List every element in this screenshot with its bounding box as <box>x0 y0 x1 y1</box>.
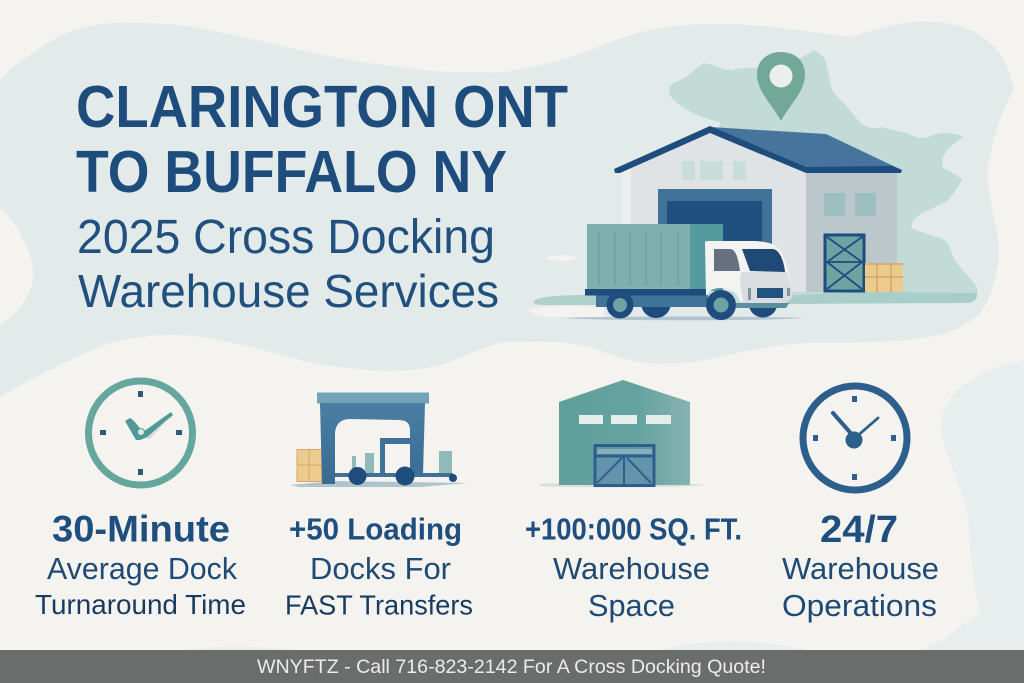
cab windows <box>714 249 740 271</box>
stat: loading docks: Docks For <box>310 551 451 586</box>
stat: 24/7 operations <box>782 509 939 623</box>
side wall <box>806 170 897 292</box>
heading line 2: TO BUFFALO NY <box>76 139 507 205</box>
windows <box>682 161 746 180</box>
wheels <box>606 290 736 320</box>
headlights <box>748 288 790 300</box>
background blob: left edge <box>0 208 33 325</box>
grille <box>757 288 783 298</box>
far wheels <box>641 288 671 318</box>
icon: navy clock <box>803 386 907 490</box>
stat: 24/7 operations: Warehouse <box>782 552 939 586</box>
forklift <box>380 438 410 476</box>
small loads <box>352 451 452 476</box>
stat: warehouse space: +100:000 SQ. FT. <box>525 512 742 546</box>
canopy <box>317 392 429 404</box>
warehouse <box>614 126 903 292</box>
icon: loading dock <box>290 392 468 487</box>
stat: dock turnaround <box>35 508 246 620</box>
background blob: header <box>0 22 1014 397</box>
roof <box>710 127 902 170</box>
ground strip right <box>780 292 977 304</box>
stat: dock turnaround: 30-Minute <box>52 508 230 550</box>
subheading line 1: 2025 Cross Docking <box>77 211 495 264</box>
truck <box>564 224 804 320</box>
background blob: bottom right <box>921 360 1024 650</box>
ground strip left <box>534 295 598 305</box>
crate <box>297 450 322 482</box>
stat: loading docks <box>285 512 473 620</box>
chassis <box>596 295 708 307</box>
title <box>76 74 568 317</box>
crates <box>865 263 903 292</box>
side door <box>825 235 864 291</box>
cloud highlights <box>529 255 604 317</box>
stat: loading docks: +50 Loading <box>289 512 462 546</box>
footer bar: WNYFTZ - Call 716-823-2142 For A Cross Docking Quote! <box>257 656 766 678</box>
stat: dock turnaround: Average Dock <box>47 552 238 586</box>
cargo box <box>587 224 691 291</box>
icon: warehouse building <box>540 380 706 487</box>
icon: teal clock <box>88 381 192 485</box>
footer bar <box>0 650 1024 683</box>
background arc: above footer <box>185 642 806 650</box>
subheading line 2: Warehouse Services <box>78 265 499 317</box>
rear bumper bar <box>736 303 789 308</box>
ground <box>290 481 468 487</box>
loading bay <box>658 189 772 245</box>
heading line 1: CLARINGTON ONT <box>76 74 568 140</box>
map silhouette <box>669 50 977 303</box>
front wall <box>622 133 806 292</box>
location pin <box>757 52 805 121</box>
stat: warehouse space <box>525 512 742 623</box>
stat: 24/7 operations: Operations <box>782 588 937 623</box>
stat: 24/7 operations: 24/7 <box>820 509 898 551</box>
shadow <box>564 316 804 320</box>
cab <box>705 241 792 302</box>
stat: warehouse space: Warehouse <box>553 552 710 586</box>
dock frame <box>320 403 425 484</box>
stat: warehouse space: Space <box>588 589 675 623</box>
stat: loading docks: FAST Transfers <box>285 590 473 620</box>
stat: dock turnaround: Turnaround Time <box>35 589 246 620</box>
